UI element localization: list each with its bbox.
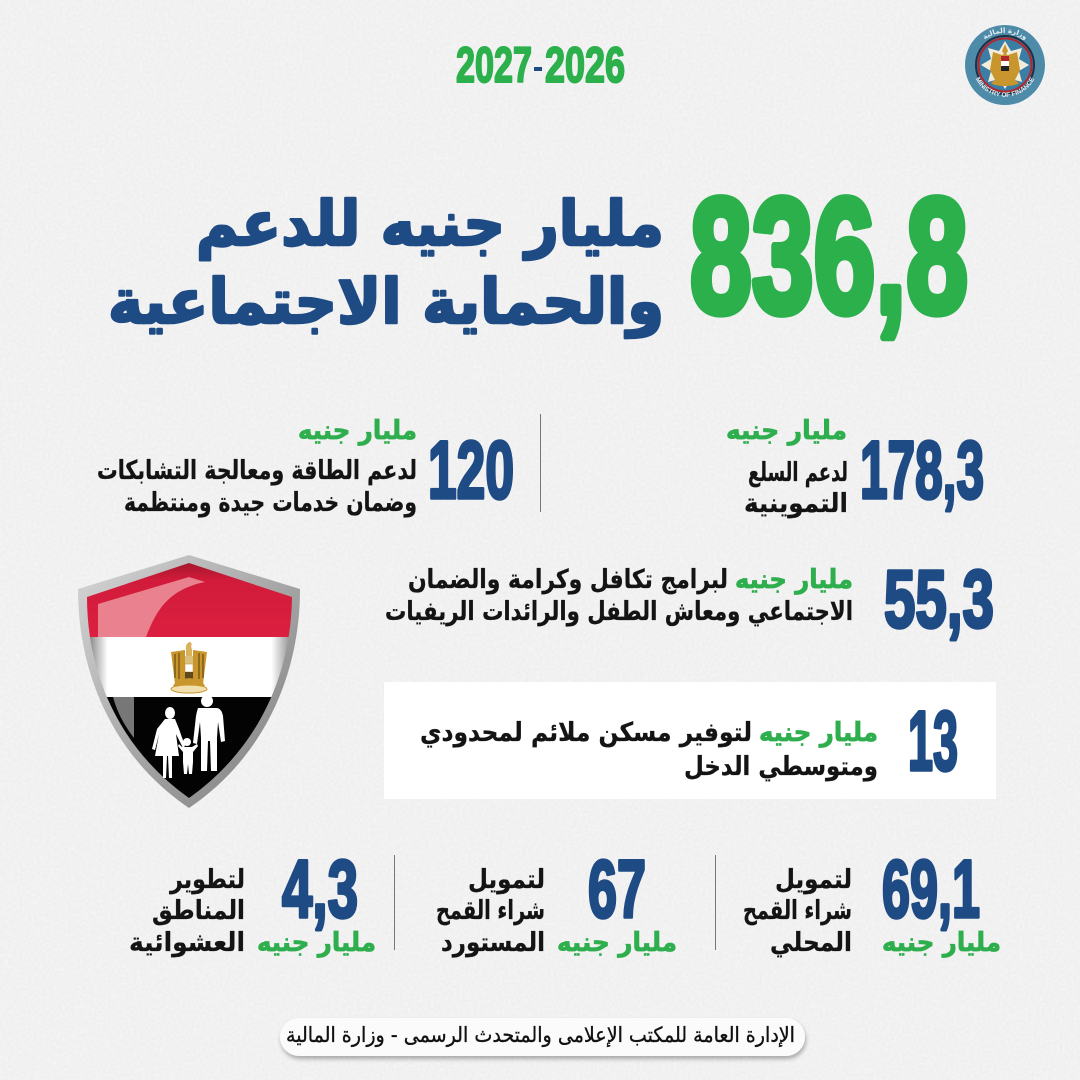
stat: 67 imported wheat: مليار جنيه [557,928,677,958]
panel: 13 housing: لتوفير مسكن ملائم لمحدودي [420,718,752,748]
stat: 120 energy: مليار جنيه [298,416,417,446]
stat: 69,1 local wheat: مليار جنيه [882,928,1001,958]
stat: 55,3 social programs: الاجتماعي ومعاش الطفل والرائدات الريفيات [385,597,853,627]
panel: 13 housing: 13 [908,694,958,788]
stat: 120 energy: 120 [428,425,514,516]
stat: 55,3 social programs: لبرامج تكافل وكرامة والضمان [408,565,728,595]
stat: 67 imported wheat [436,844,677,958]
icon: eagle emblem [171,642,207,693]
footer credit pill: الإدارة العامة للمكتب الإعلامى والمتحدث الرسمى - وزارة المالية [286,1023,795,1047]
stat: 67 imported wheat: 67 [588,844,646,935]
logo: Ministry of Finance seal [965,25,1045,105]
logo: Ministry of Finance seal: وزارة المالية [984,27,1026,40]
year heading: 2026 [545,37,625,93]
logo: Ministry of Finance seal: MINISTRY OF FINANCE [976,76,1034,97]
stat: 4,3 informal areas: مليار جنيه [257,928,376,958]
year heading [456,37,625,93]
panel: 13 housing [384,682,996,799]
stat: 120 energy [97,416,514,518]
stat: 4,3 informal areas [129,844,376,958]
panel: 13 housing: مليار جنيه [759,718,878,748]
stat: 67 imported wheat: لتمويل [468,865,545,895]
stat: 55,3 social programs [385,554,994,645]
stat: 178,3 commodities: التموينية [744,489,848,519]
stat: 178,3 commodities: مليار جنيه [726,416,847,446]
stat: 69,1 local wheat: لتمويل [775,865,852,895]
stat: 55,3 social programs: 55,3 [884,554,994,645]
stat: 4,3 informal areas: 4,3 [282,844,358,935]
stat: 178,3 commodities: لدعم السلع [748,458,848,488]
panel: 13 housing: ومتوسطي الدخل [684,752,878,782]
stat: 4,3 informal areas: المناطق [152,896,245,926]
stat: 120 energy: وضمان خدمات جيدة ومنتظمة [124,488,417,518]
headline text: والحماية الاجتماعية [108,265,664,338]
headline text: مليار جنيه للدعم [196,187,664,260]
year heading: 2027 [456,37,532,93]
stat: 69,1 local wheat: 69,1 [882,844,980,935]
stat: 120 energy: لدعم الطاقة ومعالجة التشابكات [97,456,417,486]
headline text [108,187,664,338]
stat: 69,1 local wheat: شراء القمح [743,896,852,926]
stat: 4,3 informal areas: العشوائية [129,928,245,958]
icon: shield with Egyptian flag and family [78,555,300,808]
stat: 69,1 local wheat: المحلي [770,928,852,958]
stat: 67 imported wheat: شراء القمح [436,896,545,926]
stat: 55,3 social programs: مليار جنيه [735,565,853,595]
stat: 178,3 commodities [726,416,984,519]
stat: 4,3 informal areas: لتطوير [168,865,245,895]
icon: family silhouette [152,695,225,778]
footer credit pill [280,1018,805,1056]
stat: 178,3 commodities: 178,3 [860,425,984,516]
stat: 67 imported wheat: المستورد [441,928,545,958]
stat: 69,1 local wheat [743,844,1001,958]
